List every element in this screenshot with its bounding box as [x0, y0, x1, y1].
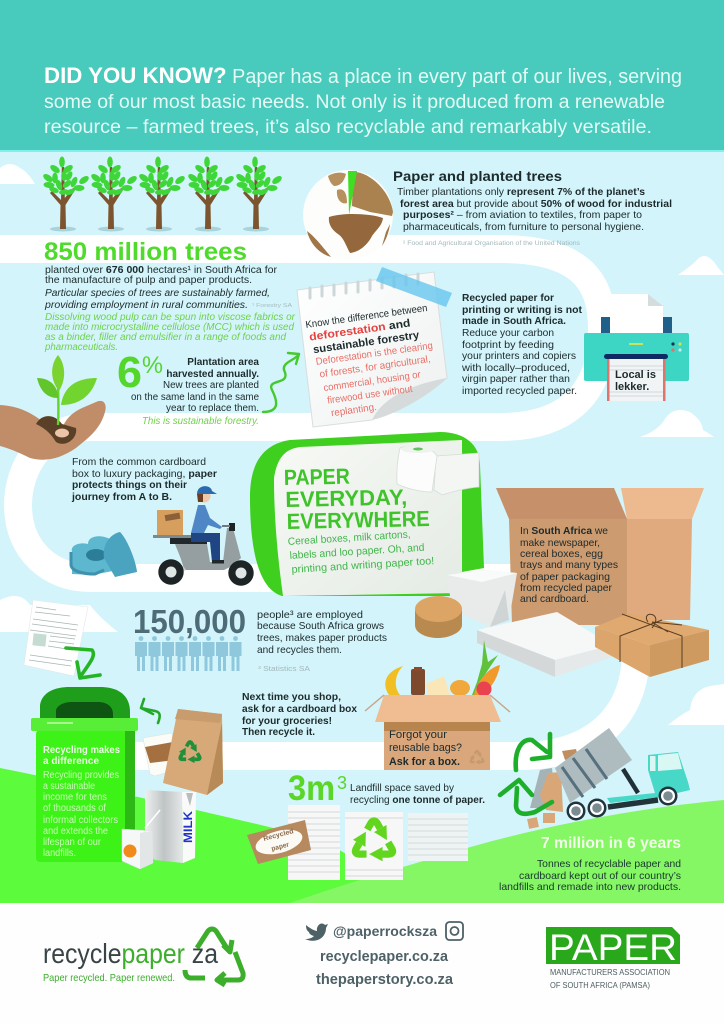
stat: 150,000 people: 150,000	[133, 603, 246, 640]
clouds	[0, 164, 724, 725]
text: plantation area harvested	[131, 357, 259, 427]
logo: PAMSA: OF SOUTH AFRICA (PAMSA)	[550, 981, 650, 990]
text: paper and planted trees: ² Food and Agricultural Organisation of the United Nations	[403, 241, 580, 247]
text: next time you shop: Then recycle it.	[242, 726, 315, 738]
text: plantation facts	[44, 265, 296, 353]
text: plantation facts: providing employment in rural communities.	[44, 300, 248, 311]
icon: open cardboard box with text: cereal boxes, egg	[520, 549, 603, 560]
text: plantation area harvested: Plantation area	[187, 357, 259, 368]
stat: 3m3 landfill saved: 3	[337, 773, 347, 793]
hill: left bright green	[0, 768, 400, 903]
bin text: lifespan of our	[43, 837, 102, 848]
text: plantation facts: made into microcrystalline cellulose (MCC) which is used	[45, 322, 294, 333]
panel heading	[284, 462, 430, 534]
text: people employed: and recycles them.	[257, 644, 342, 656]
text: paper and planted trees: Timber plantations only represent 7% of the planet’s	[397, 186, 645, 198]
icon: row of people	[135, 636, 242, 671]
note: deforestation vs sustainable forestry: Deforestation is the clearing	[315, 341, 434, 368]
text: next time you shop: for your groceries!	[242, 715, 332, 727]
text: next time you shop: Next time you shop,	[242, 691, 341, 703]
text: recycled paper note: your printers and copiers	[462, 350, 576, 362]
logo: recyclepaper za: recyclepaper za	[43, 938, 218, 969]
text: people employed: trees, makes paper products	[257, 632, 387, 644]
text: paper and planted trees: Paper and planted trees	[393, 168, 562, 184]
text: paper and planted trees	[393, 168, 672, 247]
panel body text	[287, 527, 435, 576]
icon: open cardboard box with text	[496, 488, 704, 625]
text: paper and planted trees: purposes² – from aviation to textiles, from paper to	[403, 209, 642, 221]
icon: hand holding seedling	[0, 355, 106, 460]
icon: recycled paper label: paper	[271, 841, 290, 853]
tape	[376, 267, 452, 307]
text: people employed: because South Africa grows	[257, 620, 384, 632]
text: plantation facts: Particular species of trees are sustainably farmed,	[45, 288, 270, 299]
text: plantation facts: ¹ Forestry SA	[252, 303, 292, 309]
text: paper and planted trees: pharmaceuticals, from furniture to personal hygiene.	[403, 221, 644, 233]
text: recycled paper note: made in South Africa.	[462, 315, 566, 327]
icon: white takeaway box	[447, 570, 517, 627]
text: plantation area harvested: on the same land in the same	[131, 392, 259, 403]
footer background	[0, 903, 724, 1024]
panel body text: printing and writing paper too!	[291, 555, 435, 576]
note: deforestation vs sustainable forestry: deforestation and	[309, 317, 411, 344]
icon: milk carton	[145, 790, 196, 863]
header intro text: some of our most basic needs. Not only is it produced from a renewable	[44, 91, 665, 113]
bin text: Recycling provides	[43, 770, 119, 781]
text: plantation facts: as a binder, filler and emulsifier in a range of foods and	[45, 332, 286, 343]
stat: 6 percent	[117, 348, 163, 397]
text: plantation area harvested: year to replace them.	[166, 403, 259, 414]
logo: PAMSA: PAPER	[549, 927, 677, 968]
winding white road	[0, 249, 636, 756]
icon: printer with Local is lekker paper	[584, 294, 689, 401]
icon: groceries in box: Ask for a box.	[389, 756, 460, 768]
icon: groceries in box: Forgot your	[389, 729, 447, 741]
text: 7 million in 6 years: 7 million in 6 years	[541, 835, 681, 852]
bin text: a sustainable	[43, 781, 95, 792]
icon: toilet roll	[397, 445, 479, 495]
bin text: a difference	[43, 756, 99, 767]
text: recycled paper note: imported recycled paper.	[462, 385, 577, 397]
icon: paper bag with recycle sign	[163, 709, 223, 795]
text: packaging protects: protects things on their	[72, 479, 187, 491]
text: recycled paper note: with locally–produced,	[461, 362, 570, 374]
sky background	[0, 150, 724, 903]
bin text: Recycling makes	[43, 745, 120, 756]
bin text: landfills.	[43, 848, 76, 859]
note: deforestation vs sustainable forestry: sustainable forestry	[312, 329, 421, 356]
text: recycled paper note: Recycled paper for	[462, 292, 554, 304]
icon: coffee cup	[143, 733, 175, 776]
icon: open cardboard box with text: In South Africa we	[520, 526, 608, 537]
panel: recycling bin	[31, 687, 138, 862]
panel: paper everyday, everywhere	[250, 432, 484, 596]
text: packaging protects: journey from A to B.	[71, 491, 172, 503]
stat: 3m3 landfill saved	[288, 769, 485, 808]
text: packaging protects	[71, 456, 217, 503]
icon: tipper truck unloading	[527, 728, 690, 829]
text: recycled paper note	[461, 292, 582, 397]
box	[375, 695, 501, 722]
text: 7 million in 6 years: cardboard kept out of our country’s	[519, 870, 681, 882]
note: deforestation vs sustainable forestry: firewood use without	[327, 384, 414, 407]
text: plantation area harvested: This is sustainable forestry.	[142, 416, 259, 427]
icon: printer with Local is lekker paper: lekker.	[615, 381, 649, 393]
icon: recycled paper label: Recycled	[263, 828, 294, 843]
stat: 3m3 landfill saved: recycling one tonne of paper.	[350, 794, 485, 806]
row of five trees	[42, 156, 283, 232]
icon: open cardboard box with text: trays and many types	[520, 560, 618, 571]
icon: open cardboard box with text: from recycled paper	[520, 583, 613, 594]
social and web links: @paperrocksza	[333, 923, 437, 939]
stat: 6 percent: %	[142, 352, 163, 379]
icon: round kraft box	[415, 596, 462, 638]
note: deforestation vs sustainable forestry: Know the difference between	[305, 303, 428, 331]
text: packaging protects: From the common cardboard	[72, 456, 206, 468]
social and web links: recyclepaper.co.za	[320, 949, 449, 965]
text: 7 million in 6 years	[499, 835, 681, 893]
note: deforestation vs sustainable forestry: of forests, for agricultural,	[319, 354, 431, 381]
icon: open cardboard box with text: make newspaper,	[520, 538, 600, 549]
icon: printer with Local is lekker paper: Local is	[615, 369, 656, 381]
arrow: document to bin	[66, 648, 100, 678]
bin text: income for tens	[43, 792, 107, 803]
logo: recyclepaper za: Paper recycled. Paper renewed.	[43, 972, 175, 984]
text: packaging protects: box to luxury packaging, paper	[72, 468, 217, 480]
text: people employed: ³ Statistics SA	[258, 666, 310, 673]
arrows: recycling loop	[500, 734, 552, 814]
text: people employed: people³ are employed	[257, 609, 363, 621]
text: plantation facts: planted over 676 000 hectares¹ in South Africa for	[45, 265, 278, 276]
text: recycled paper note: printing or writing is not	[462, 304, 582, 316]
panel heading: EVERYWHERE	[287, 506, 430, 534]
text: next time you shop	[242, 691, 357, 738]
header intro text: resource – farmed trees, it’s also recyclable and remarkably versatile.	[44, 116, 652, 138]
text: recycled paper note: Reduce your carbon	[462, 327, 554, 339]
icon: printed document	[24, 600, 88, 676]
text: 7 million in 6 years: Tonnes of recyclable paper and	[537, 858, 681, 870]
icon: pizza box	[477, 612, 612, 677]
heading: 850 million trees: 850 million trees	[44, 238, 247, 266]
icon: milk carton: MILK	[181, 811, 195, 843]
social and web links	[305, 922, 463, 988]
icon: heart gift box	[71, 532, 137, 577]
text: plantation facts: the manufacture of pulp and paper products.	[45, 275, 252, 286]
text: plantation area harvested: harvested annually.	[166, 369, 259, 380]
stat: 3m3 landfill saved: Landfill space saved by	[350, 782, 455, 794]
text: recycled paper note: footprint by feeding	[462, 339, 554, 351]
bin text: of thousands of	[43, 803, 106, 814]
stat: 6 percent: 6	[117, 348, 142, 397]
text: plantation facts: Dissolving wood pulp can be spun into viscose fabrics or	[45, 312, 296, 323]
icon: open cardboard box with text: of paper packaging	[520, 572, 610, 583]
social and web links: thepaperstory.co.za	[316, 972, 454, 988]
logo: recyclepaper za	[43, 929, 243, 985]
header intro text	[44, 63, 682, 138]
text: recycled paper note: virgin paper rather than	[462, 373, 570, 385]
stat: 150,000 people	[133, 603, 246, 671]
note: deforestation vs sustainable forestry: commercial, housing or	[323, 369, 422, 394]
panel heading: EVERYDAY,	[285, 484, 408, 512]
logo: PAMSA: MANUFACTURERS ASSOCIATION	[550, 968, 670, 977]
bin text	[43, 745, 120, 859]
icon: juice box	[122, 810, 160, 869]
icon: groceries in box: reusable bags?	[389, 742, 462, 754]
bin text: and extends the	[43, 826, 108, 837]
header banner	[0, 0, 724, 152]
text: paper and planted trees: forest area but provide about 50% of wood for industrial	[400, 198, 672, 210]
note: deforestation vs sustainable forestry: replanting.	[330, 402, 378, 419]
note: deforestation vs sustainable forestry	[297, 267, 452, 427]
header intro text: DID YOU KNOW? Paper has a place in every part of our lives, serving	[44, 63, 682, 88]
panel body text: labels and loo paper. Oh, and	[289, 542, 425, 562]
icon: open cardboard box with text: and cardboard.	[520, 594, 589, 605]
food	[385, 640, 500, 696]
text: plantation facts: pharmaceuticals.	[44, 342, 118, 353]
icon: instagram	[446, 922, 463, 940]
hill: right light green	[290, 800, 724, 903]
text: 7 million in 6 years: landfills and remade into new products.	[499, 881, 681, 893]
stat: 3m3 landfill saved: 3m	[288, 769, 335, 808]
icon: globe	[303, 170, 393, 260]
icon: stacks of recycled paper	[288, 805, 468, 880]
panel body text: Cereal boxes, milk cartons,	[287, 529, 411, 548]
icon: delivery scooter	[153, 486, 254, 586]
arrow: items into bin	[141, 699, 160, 723]
icon: recycling triangle	[185, 929, 243, 985]
panel heading: PAPER	[284, 464, 350, 490]
icon: recycled paper label	[247, 820, 311, 864]
logo: PAMSA	[546, 927, 680, 990]
text: next time you shop: ask for a cardboard box	[242, 703, 357, 715]
bin text: informal collectors	[43, 815, 118, 826]
icon: wrapped gift box	[595, 613, 709, 677]
text: people employed	[257, 609, 387, 673]
arrow: green squiggle	[263, 353, 299, 412]
text: plantation area harvested: New trees are planted	[163, 380, 259, 391]
icon: groceries in box	[365, 640, 510, 770]
icon: twitter bird	[305, 924, 328, 941]
